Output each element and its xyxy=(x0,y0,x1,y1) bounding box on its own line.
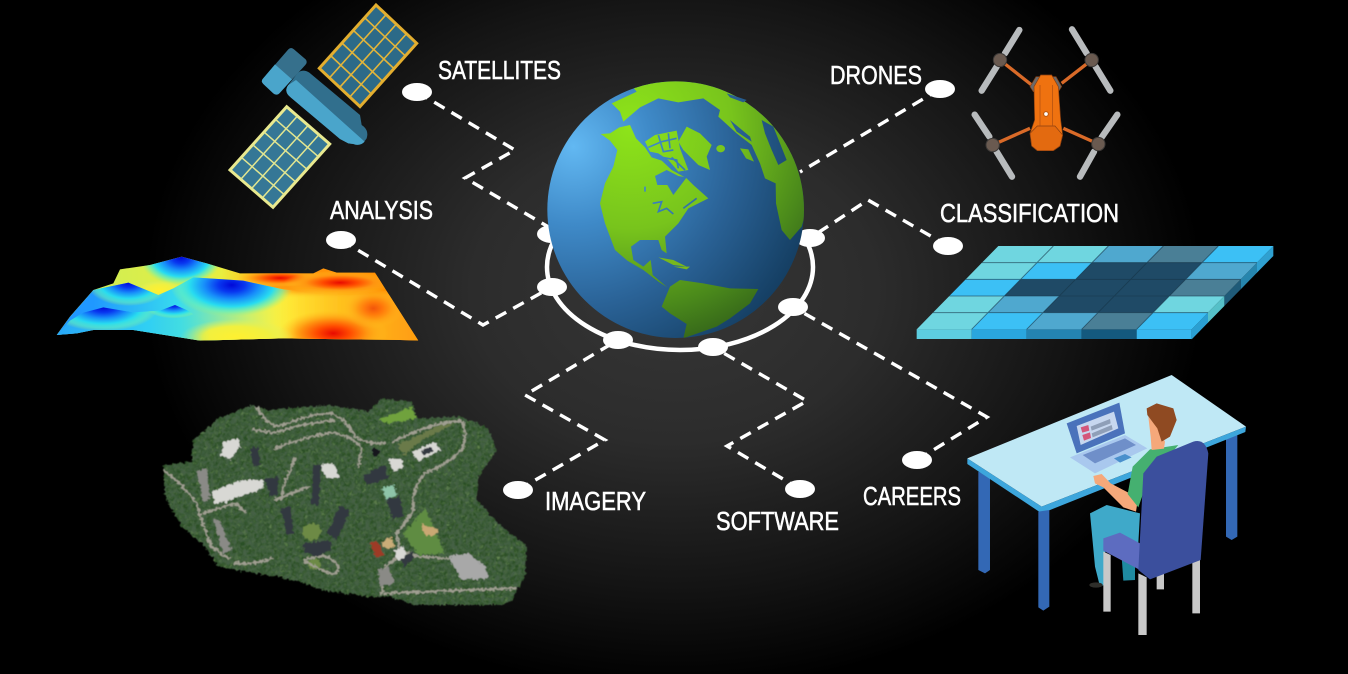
back blue peak xyxy=(143,256,219,285)
dashed connector: imagery xyxy=(518,340,618,490)
lower red hot spot xyxy=(284,313,380,340)
right orange hot spot xyxy=(351,295,397,322)
person arm xyxy=(1093,474,1138,512)
aerial imagery map xyxy=(155,390,535,607)
continent: south america xyxy=(662,280,758,338)
label: careers: CAREERS xyxy=(863,481,961,511)
dashed connector: satellites xyxy=(417,92,552,229)
channels between arctic islands xyxy=(648,133,685,170)
endpoint node: drones xyxy=(925,80,955,98)
endpoint node: software xyxy=(785,480,815,498)
roads xyxy=(163,407,517,593)
label: imagery: IMAGERY xyxy=(545,486,646,516)
continent: greenland xyxy=(678,127,712,170)
yellow saddle xyxy=(142,282,175,295)
label: software: SOFTWARE xyxy=(716,506,839,536)
dark roofs xyxy=(250,447,433,567)
britain xyxy=(740,148,754,162)
dashed connector: classification xyxy=(810,200,948,246)
upper solar panel xyxy=(319,5,417,107)
dashed connector: drones xyxy=(800,89,940,172)
label: drones: DRONES xyxy=(830,60,922,90)
trailing leg and shoe xyxy=(1122,557,1135,581)
baseball and sports fields xyxy=(370,523,439,558)
middle ridge sheet xyxy=(56,278,292,341)
buildings xyxy=(212,438,488,580)
drone body xyxy=(1030,75,1063,151)
right yellow to orange field xyxy=(212,290,418,341)
ring nodes xyxy=(537,225,825,356)
orbit ring xyxy=(547,184,813,350)
dashed connector: software xyxy=(713,347,807,489)
motors xyxy=(986,53,1105,152)
laptop xyxy=(1067,403,1147,473)
endpoint node: imagery xyxy=(503,481,533,499)
desk with person at laptop xyxy=(967,375,1246,635)
desk leg front xyxy=(1038,510,1049,611)
chair legs rear xyxy=(1157,568,1164,589)
desk edge xyxy=(967,427,1246,513)
endpoint node: satellites xyxy=(402,83,432,101)
person shoe xyxy=(1089,582,1103,588)
front ridge sheet xyxy=(56,305,206,340)
desk legs back xyxy=(978,432,1237,573)
endpoint node: classification xyxy=(933,237,963,255)
water details xyxy=(604,93,787,243)
endpoint node: careers xyxy=(902,451,932,469)
label: satellites: SATELLITES xyxy=(438,55,561,85)
drone icon xyxy=(975,29,1117,177)
classification grid xyxy=(917,246,1273,339)
continent: eurasia and africa xyxy=(612,77,808,240)
terrain surface plot xyxy=(56,256,418,341)
arctic islands xyxy=(645,131,688,172)
parking lots xyxy=(197,468,395,587)
person neck and face xyxy=(1148,417,1165,450)
globe xyxy=(547,77,808,338)
label: analysis: ANALYSIS xyxy=(330,195,433,225)
satellite icon xyxy=(230,5,417,207)
dashed connector: analysis xyxy=(341,240,552,325)
iceland xyxy=(716,145,725,152)
great lakes xyxy=(645,187,697,214)
chair legs front xyxy=(1103,552,1200,635)
front faces xyxy=(917,329,1192,339)
lawns xyxy=(302,407,455,569)
red ridge band xyxy=(242,273,312,286)
chair back xyxy=(1138,441,1208,579)
person hair xyxy=(1147,403,1177,442)
side faces xyxy=(1192,246,1273,339)
propeller blades xyxy=(975,29,1117,177)
caribbean islands xyxy=(658,257,690,269)
camera dot xyxy=(1044,112,1048,116)
person legs xyxy=(1090,505,1140,587)
desk top xyxy=(967,375,1246,507)
person shirt xyxy=(1128,445,1178,507)
lower solar panel xyxy=(230,107,330,207)
chair seat xyxy=(1103,533,1140,570)
continent: north america xyxy=(600,125,708,287)
back sheet xyxy=(56,256,418,341)
endpoint node: analysis xyxy=(326,231,356,249)
dashed connector: careers xyxy=(793,307,987,460)
label: classification: CLASSIFICATION xyxy=(940,198,1119,228)
top tiles xyxy=(917,246,1273,329)
satellite body xyxy=(262,48,367,145)
drone arms xyxy=(993,60,1098,145)
